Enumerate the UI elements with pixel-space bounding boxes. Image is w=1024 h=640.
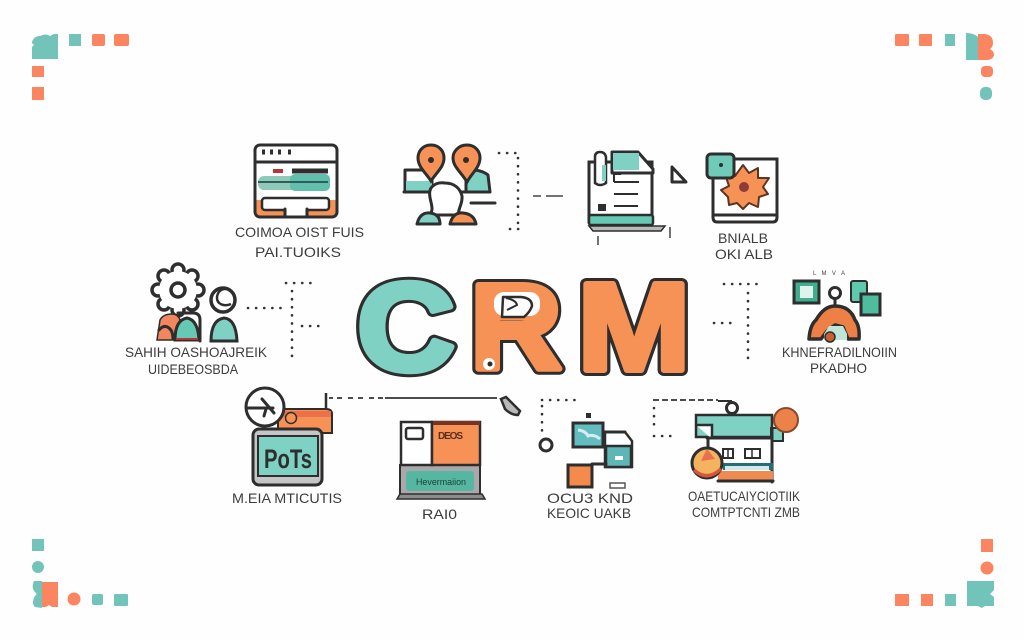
icon: files: [568, 413, 632, 488]
icon: person with boards: L M V A: [813, 271, 845, 277]
icon: laptop: Hevermaiion: [416, 477, 466, 487]
icon: gear and team: [152, 264, 237, 341]
label: gear card: [715, 230, 773, 262]
connector: right dotted: [714, 284, 758, 363]
label: files: KEOIC UAKB: [547, 505, 631, 521]
icon: document on laptop: [589, 152, 670, 245]
label: house: OAETUCAIYCIOTIIK: [688, 488, 801, 504]
connector: long dashed line with pen: [329, 397, 520, 415]
label: files: OCU3 KND: [547, 490, 633, 506]
corner decoration: top left: [32, 34, 129, 100]
label: gear card: BNIALB: [718, 230, 768, 246]
label: laptop: RAI0: [422, 506, 457, 522]
icon: house: [692, 400, 798, 482]
connector: top dotted: [499, 153, 563, 229]
icon: media monitor: PoTs: [264, 444, 312, 474]
icon: browser window: [255, 145, 337, 217]
connector: left dotted: [248, 283, 326, 363]
letter R: R: [470, 259, 562, 395]
icon: laptop: [397, 422, 485, 499]
connector: dashed to house: [653, 399, 718, 401]
label: gear and team: SAHIH OASHOAJREIK: [125, 344, 268, 360]
icon: person with boards: [794, 271, 880, 342]
corner decoration: top right: [895, 33, 994, 100]
label: gear and team: UIDEBEOSBDA: [148, 361, 239, 377]
icon: media monitor: [246, 388, 332, 485]
label: house: [688, 488, 801, 520]
icon: map pins and person: [404, 145, 495, 224]
label: gear and team: [125, 344, 268, 377]
label: person with boards: KHNEFRADILNOIIN: [782, 344, 897, 360]
letter R: R: [470, 259, 562, 395]
corner decoration: bottom left: [32, 539, 128, 608]
label: house: COMTPTCNTI ZMB: [692, 504, 800, 520]
label: person with boards: [782, 344, 897, 376]
icon: triangle: [672, 167, 686, 182]
icon: laptop: DEOS: [438, 431, 463, 442]
label: browser: COIMOA OIST FUIS: [235, 224, 364, 240]
label: browser: PAI.TUOIKS: [255, 244, 341, 260]
letter C: C: [357, 258, 455, 397]
corner decoration: bottom right: [895, 539, 994, 608]
letter M: M: [578, 258, 690, 397]
letter M: M: [578, 258, 690, 397]
label: browser: [235, 224, 364, 260]
icon: gear card: [707, 154, 777, 222]
title: CRM: [357, 258, 690, 397]
connector: dotted to files: [540, 400, 581, 451]
label: media monitor: M.EIA MTICUTIS: [232, 490, 342, 506]
letter C: C: [357, 258, 455, 397]
label: person with boards: PKADHO: [810, 360, 867, 376]
connector: dotted down from dashed line: [654, 408, 678, 436]
label: files: [547, 490, 633, 521]
label: gear card: OKI ALB: [715, 246, 773, 262]
